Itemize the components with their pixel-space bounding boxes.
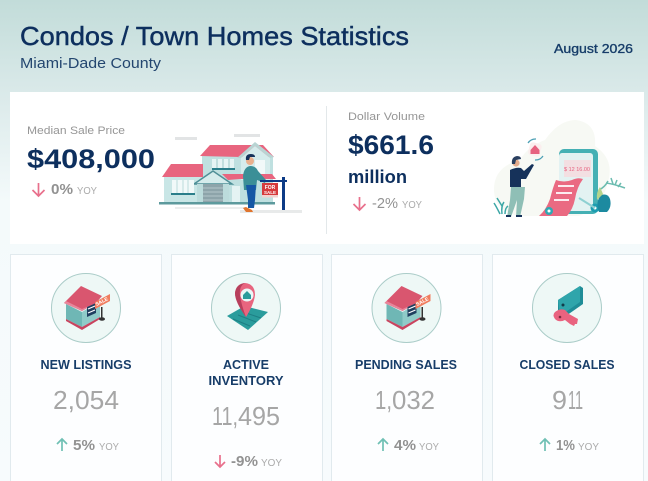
icon: house for sale [372,274,441,342]
illustration: person with phone and receipt [494,120,625,217]
illustration: person with phone and receipt: $ 12 16.00 [564,167,590,173]
panel: active inventory [172,254,322,481]
icon: house for sale: SALE [415,296,430,308]
illustration: house with agent and sale sign [159,134,302,213]
heading: CLOSED SALES [520,358,614,372]
value: 2,054 [53,385,119,415]
value: 1, [375,385,392,415]
heading [208,358,284,388]
change: YOY [419,442,439,453]
dollar volume block: million [348,167,407,187]
panel: featured statistics [10,92,644,244]
dollar volume block: $661.6 [348,130,434,160]
panel: pending sales [332,254,482,481]
icon: key and tag [532,274,602,342]
change: YOY [261,458,282,469]
value: 9 [552,385,567,415]
value: 11 [568,385,583,415]
change: -9% [231,453,258,470]
subtitle: Miami-Dade County [20,55,162,72]
median sale price block: $408,000 [27,144,155,174]
heading: INVENTORY [208,374,284,388]
heading: PENDING SALES [355,358,457,372]
median sale price block: 0% [51,181,73,198]
change [540,437,599,454]
illustration: house with agent and sale sign: FOR [265,185,276,191]
panel: closed sales [492,254,644,481]
icon: house for sale [52,274,120,342]
change: 1% [556,437,575,454]
heading: ACTIVE [223,358,269,372]
change [378,437,439,454]
icon: map pin [212,274,280,342]
house bubble [527,139,543,160]
dollar volume block: Dollar Volume [348,111,425,123]
median sale price block: Median Sale Price [27,125,125,137]
panel: new listings [10,254,162,481]
value: 495 [238,401,280,431]
value: 032 [392,385,435,415]
value [212,401,280,431]
change [215,453,282,470]
median sale price block [27,125,155,198]
median sale price block: YOY [77,186,97,197]
dollar volume block: -2% [372,195,398,212]
icon: house for sale: SALE [95,296,110,308]
change: YOY [578,442,599,453]
dollar volume block [348,111,434,212]
value [552,385,583,415]
change: 4% [394,437,416,454]
heading: NEW LISTINGS [40,358,132,372]
change [57,437,119,454]
date: August 2026 [554,41,633,56]
dollar volume block: YOY [402,200,422,211]
value: 11, [212,401,238,431]
change: 5% [73,437,95,454]
title: Condos / Town Homes Statistics [20,21,409,51]
change: YOY [99,442,119,453]
illustration: house with agent and sale sign: SALE [264,190,276,195]
